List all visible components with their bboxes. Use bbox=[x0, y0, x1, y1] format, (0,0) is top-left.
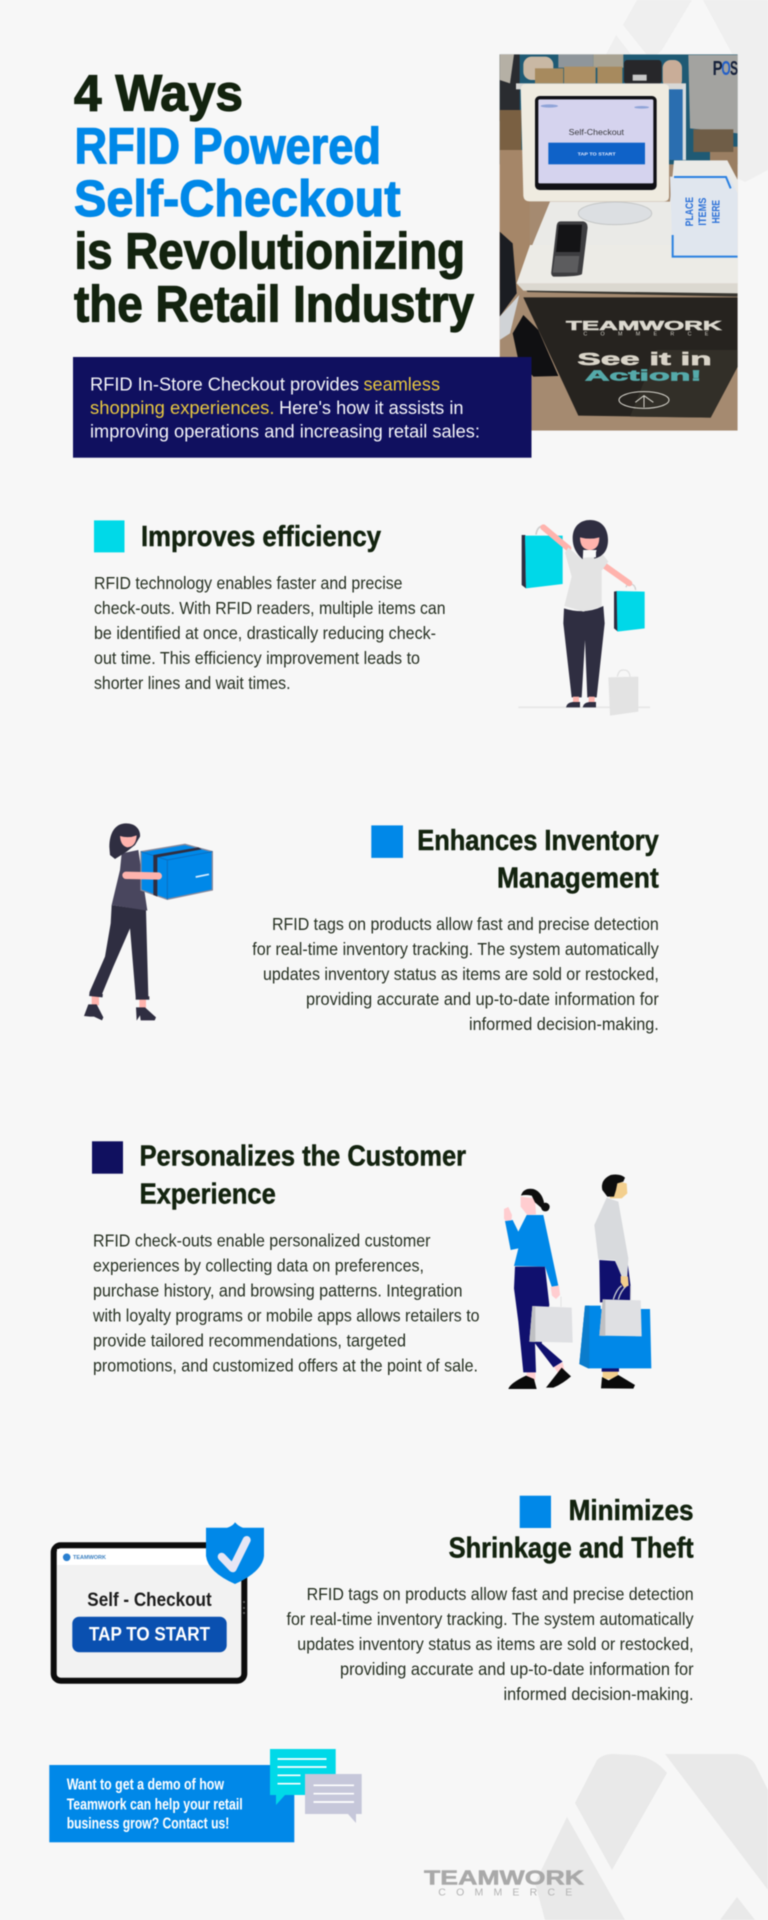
photo: self-checkout kiosk: See it in bbox=[577, 349, 712, 369]
photo: self-checkout kiosk: PLACE bbox=[684, 197, 696, 226]
body text: for real-time inventory tracking. The system automatically bbox=[252, 939, 659, 959]
heading: Minimizes bbox=[569, 1495, 694, 1527]
intro panel: RFID In-Store Checkout provides bbox=[90, 374, 359, 395]
marker square bbox=[94, 520, 124, 552]
body text: out time. This efficiency improvement leads to bbox=[94, 648, 420, 668]
icon: shield check bbox=[206, 1522, 264, 1584]
heading: Management bbox=[497, 862, 659, 894]
front panel bbox=[523, 297, 738, 418]
intro panel: seamless bbox=[364, 374, 440, 395]
intro panel: improving operations and increasing retail sales: bbox=[90, 420, 480, 441]
illustration: woman with shopping bags bbox=[518, 520, 650, 716]
table edge bbox=[517, 283, 738, 294]
callout: demo contact: Want to get a demo of how bbox=[67, 1776, 225, 1793]
photo: self-checkout kiosk: ITEMS bbox=[697, 197, 709, 226]
logo: Teamwork Commerce: COMMERCE bbox=[438, 1886, 572, 1898]
intro panel bbox=[73, 357, 532, 458]
body text: experiences by collecting data on preferences, bbox=[93, 1256, 424, 1276]
POS text: P bbox=[713, 57, 723, 80]
tablet: TAP TO START bbox=[89, 1625, 210, 1646]
title: is Revolutionizing bbox=[74, 223, 465, 280]
table top bbox=[532, 160, 738, 246]
illustration: tablet with shield bbox=[54, 1522, 264, 1681]
heading: Improves efficiency bbox=[141, 521, 381, 553]
body text: be identified at once, drastically reducing check- bbox=[94, 623, 436, 643]
marker square bbox=[371, 825, 403, 858]
tablet: Self - Checkout bbox=[87, 1590, 212, 1611]
callout: demo contact: Teamwork can help your retail bbox=[67, 1796, 243, 1813]
title: 4 Ways bbox=[74, 65, 243, 122]
callout: demo contact: business grow? Contact us! bbox=[67, 1816, 229, 1833]
logo: Teamwork Commerce bbox=[424, 1867, 585, 1898]
logo: Teamwork Commerce: TEAMWORK bbox=[424, 1867, 585, 1889]
section 4: minimizes shrinkage and theft bbox=[286, 1495, 694, 1704]
body text: purchase history, and browsing patterns. Integration bbox=[93, 1281, 462, 1301]
body text: providing accurate and up-to-date information for bbox=[306, 989, 659, 1009]
body text: RFID technology enables faster and precise bbox=[94, 573, 402, 593]
marker square bbox=[92, 1141, 123, 1174]
body text: providing accurate and up-to-date information for bbox=[340, 1659, 694, 1679]
body text bbox=[94, 573, 446, 693]
body text bbox=[286, 1584, 694, 1704]
body text: informed decision-making. bbox=[504, 1684, 694, 1704]
title: RFID Powered bbox=[74, 117, 381, 174]
dark bag left bbox=[500, 232, 517, 317]
heading bbox=[140, 1141, 466, 1210]
tablet bbox=[54, 1545, 245, 1681]
body text: check-outs. With RFID readers, multiple items can bbox=[94, 598, 446, 618]
body text: RFID tags on products allow fast and precise detection bbox=[272, 914, 659, 934]
heading: Experience bbox=[140, 1178, 276, 1210]
body text: promotions, and customized offers at the point of sale. bbox=[93, 1356, 478, 1376]
tablet: TEAMWORK bbox=[73, 1555, 106, 1561]
title: Self-Checkout bbox=[74, 170, 401, 227]
photo: self-checkout kiosk: TEAMWORK bbox=[566, 319, 723, 333]
body text: with loyalty programs or mobile apps allows retailers to bbox=[92, 1306, 480, 1326]
heading bbox=[417, 825, 659, 894]
section 2: enhances inventory management bbox=[252, 825, 659, 1034]
photo: self-checkout kiosk bbox=[500, 54, 738, 431]
photo: self-checkout kiosk: O bbox=[721, 57, 731, 80]
intro panel: Here's how it assists in bbox=[279, 397, 464, 418]
section 3: personalizes the customer experience bbox=[92, 1141, 480, 1376]
photo: self-checkout kiosk: Action! bbox=[585, 369, 702, 385]
marker square bbox=[520, 1496, 551, 1528]
body text bbox=[252, 914, 659, 1034]
body text: provide tailored recommendations, targeted bbox=[93, 1331, 406, 1351]
intro panel: shopping experiences. bbox=[90, 397, 274, 418]
body text bbox=[92, 1231, 480, 1376]
body text: informed decision-making. bbox=[469, 1014, 659, 1034]
photo: self-checkout kiosk: HERE bbox=[710, 200, 722, 223]
photo: self-checkout kiosk: COMMERCE bbox=[583, 332, 709, 338]
photo: self-checkout kiosk: TAP TO START bbox=[578, 151, 616, 157]
body text: RFID tags on products allow fast and precise detection bbox=[307, 1584, 694, 1604]
heading: Shrinkage and Theft bbox=[449, 1532, 694, 1564]
illustration: woman carrying box bbox=[84, 823, 212, 1021]
photo: self-checkout kiosk: Self-Checkout bbox=[569, 127, 625, 137]
icon: chat bubbles bbox=[270, 1749, 362, 1823]
body text: updates inventory status as items are sold or restocked, bbox=[297, 1634, 694, 1654]
watermark: bottom right logo shape bbox=[535, 1754, 768, 1920]
heading bbox=[449, 1495, 694, 1564]
monitor bbox=[521, 84, 669, 201]
body text: for real-time inventory tracking. The system automatically bbox=[286, 1609, 694, 1629]
payment terminal bbox=[551, 221, 588, 277]
illustration: couple with shopping bags bbox=[504, 1175, 651, 1389]
heading: Enhances Inventory bbox=[417, 825, 659, 857]
title bbox=[74, 65, 475, 333]
body text: updates inventory status as items are sold or restocked, bbox=[263, 964, 659, 984]
title: the Retail Industry bbox=[74, 276, 475, 333]
section 1: improves efficiency bbox=[94, 520, 446, 693]
watermark: top right logo shape bbox=[600, 0, 768, 182]
photo: self-checkout kiosk: S bbox=[730, 57, 738, 80]
callout: demo contact bbox=[49, 1765, 294, 1842]
place items mat bbox=[670, 177, 738, 257]
heading: Personalizes the Customer bbox=[140, 1141, 466, 1173]
body text: shorter lines and wait times. bbox=[94, 673, 290, 693]
stand bbox=[578, 202, 652, 225]
body text: RFID check-outs enable personalized customer bbox=[93, 1231, 431, 1251]
